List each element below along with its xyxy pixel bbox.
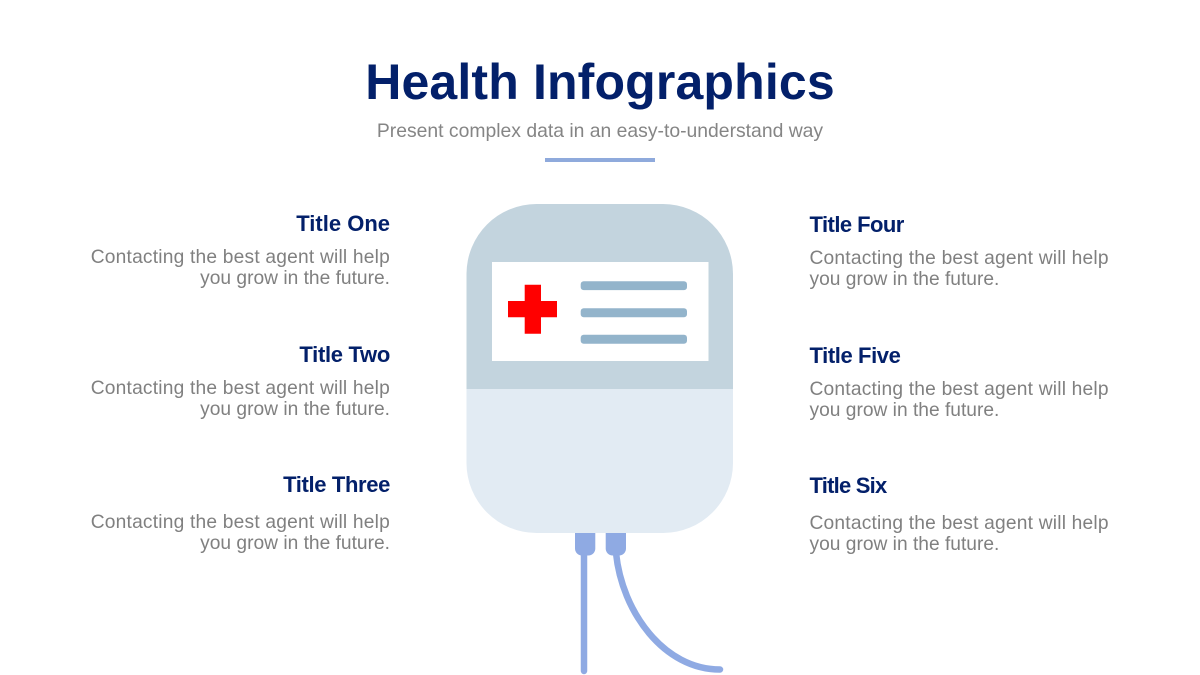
subtitle: Present complex data in an easy-to-understand way <box>377 120 823 142</box>
text block: Title One: you grow in the future. <box>200 268 390 289</box>
left connector <box>575 533 595 556</box>
text block: Title Six: you grow in the future. <box>810 534 999 555</box>
text block: Title Six <box>810 473 1109 555</box>
text block: Title Three <box>91 472 390 554</box>
text block: Title Two <box>91 342 390 420</box>
text block: Title Four: Contacting the best agent will help <box>810 248 1109 269</box>
text block: Title Five: Title Five <box>810 343 900 368</box>
text block: Title Five: Contacting the best agent will help <box>810 379 1109 400</box>
text block: Title One: Title One <box>296 211 390 236</box>
text block: Title Three: you grow in the future. <box>200 533 390 554</box>
right tube <box>616 553 720 670</box>
title underline <box>545 158 655 162</box>
text block: Title Five <box>810 343 1109 421</box>
text block: Title Six: Contacting the best agent will help <box>810 513 1109 534</box>
title: Health Infographics <box>365 54 835 110</box>
text block: Title Two: Title Two <box>299 342 390 367</box>
label lines <box>581 281 687 344</box>
left tube <box>581 553 587 671</box>
right connector <box>606 533 626 556</box>
text block: Title Four: you grow in the future. <box>810 269 999 290</box>
bag upper section <box>466 204 733 389</box>
text block: Title Four: Title Four <box>810 212 904 237</box>
text block: Title Two: Contacting the best agent will help <box>91 378 390 399</box>
text block: Title Five: you grow in the future. <box>810 400 999 421</box>
text block: Title One <box>91 211 390 289</box>
bag lower section <box>466 389 733 533</box>
label card <box>492 262 708 361</box>
text block: Title Three: Title Three <box>283 472 390 497</box>
text block: Title Four <box>810 212 1109 290</box>
text block: Title Two: you grow in the future. <box>200 399 390 420</box>
icon: red cross <box>508 285 557 334</box>
text block: Title Three: Contacting the best agent will help <box>91 512 390 533</box>
text block: Title Six: Title Six <box>810 473 886 498</box>
text block: Title One: Contacting the best agent will help <box>91 247 390 268</box>
